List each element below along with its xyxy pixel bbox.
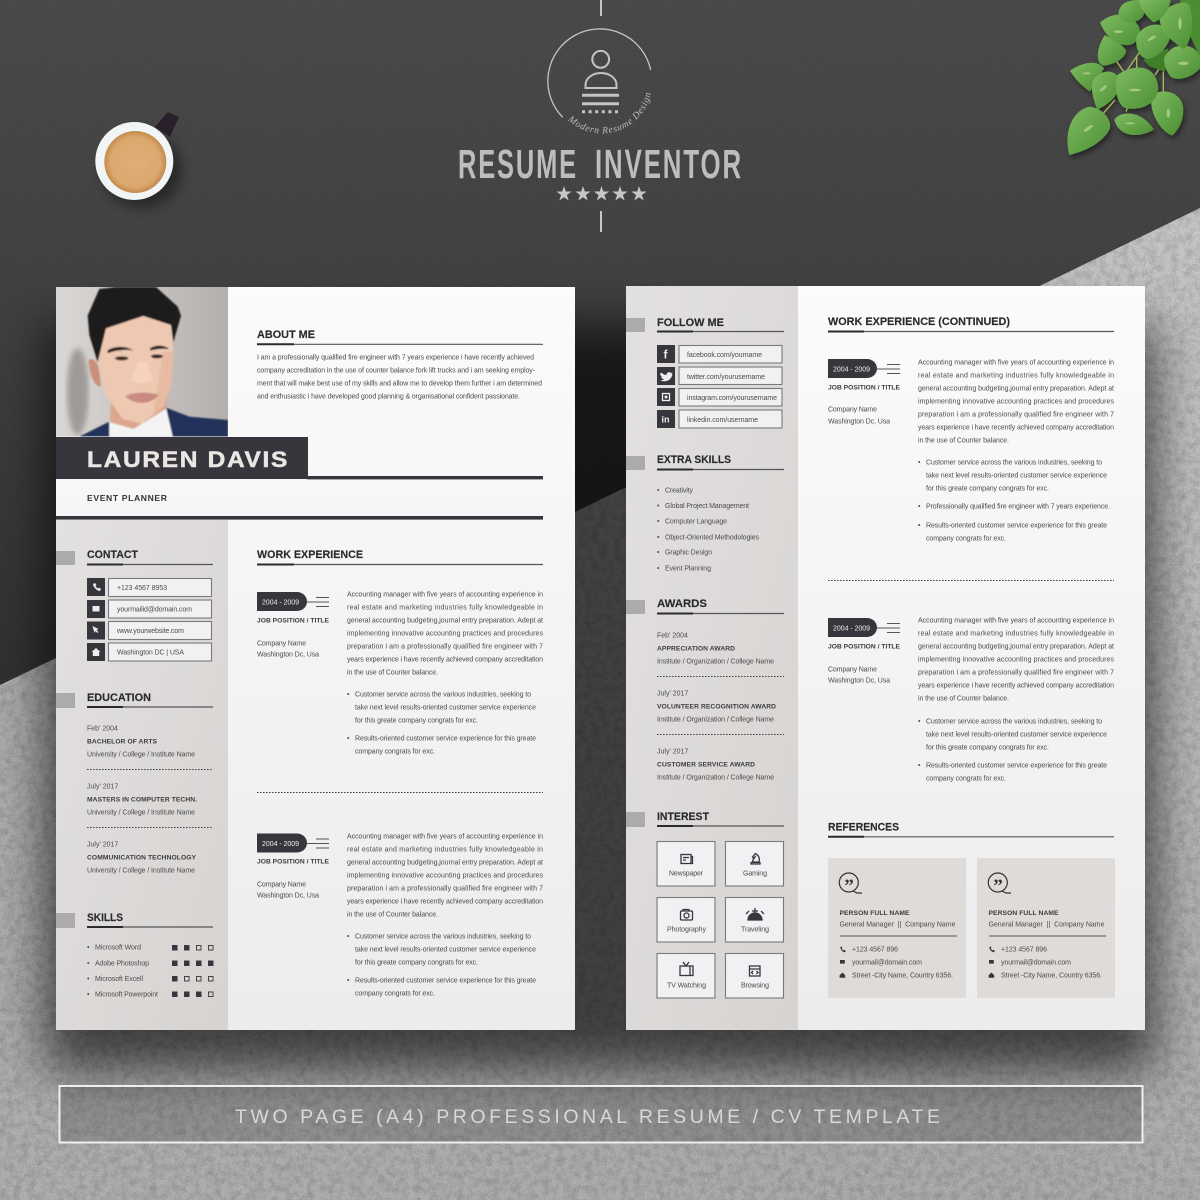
section: education: MASTERS IN COMPUTER TECHN. (87, 796, 197, 803)
job entry one meta (257, 592, 330, 658)
section: skills: • (87, 976, 90, 983)
section: about me (257, 329, 543, 400)
section: interest: Traveling (741, 926, 769, 933)
section: follow me: FOLLOW ME (657, 317, 725, 329)
job entry two text: • (347, 978, 350, 984)
bottom banner (60, 1086, 1142, 1142)
section: references: REFERENCES (828, 822, 899, 834)
job entry three text: Accounting manager with five years of accounting experience in (918, 360, 1114, 366)
reference card two: PERSON FULL NAME (988, 910, 1059, 917)
section: education: COMMUNICATION TECHNOLOGY (87, 854, 197, 861)
job entry four text: for this greate company congrats for exc. (926, 744, 1049, 752)
section: about me: ment that will make best use of my skills and allow me to develop them further i am determined (257, 380, 542, 387)
reference card one: General Manager || Company Name (840, 921, 956, 928)
section: skills: Microsoft Powerpoint (95, 991, 158, 998)
job entry four meta: 2004 - 2009 (833, 625, 870, 632)
job entry four text: in the use of Counter balance. (918, 696, 1009, 702)
job entry four text: preparation i am a professionally qualified fire engineer with 7 (918, 670, 1114, 676)
job title: EVENT PLANNER (87, 493, 168, 503)
job entry three meta (828, 359, 901, 425)
section: awards: Institute / Organization / College Name (657, 658, 774, 665)
job entry one text: • (347, 692, 350, 698)
name band (56, 437, 543, 479)
section: awards (626, 598, 784, 781)
job entry two text: take next level results-oriented customer service experience (355, 946, 536, 954)
section: work experience continued (828, 316, 1114, 782)
job entry one text: implementing innovative accounting practices and procedures (347, 630, 544, 638)
section: contact: www.yourwebsite.com (116, 628, 184, 635)
logo wordmark: INVENTOR (595, 141, 743, 187)
job entry one text: • (347, 736, 350, 742)
section: interest: Newspaper (669, 870, 704, 877)
section: extra skills: EXTRA SKILLS (657, 454, 731, 466)
icon: logo circle with person (548, 29, 651, 117)
reference card two: +123 4567 896 (1001, 946, 1047, 953)
reference card one: yourmail@domain.com (852, 959, 922, 966)
section: skills: • (87, 944, 90, 951)
section: contact: Washington DC | USA (117, 650, 184, 656)
section: interest: TV Watching (667, 982, 706, 989)
job entry four text: years experience i have recently achieved company accreditation (918, 682, 1114, 690)
section: skills: SKILLS (87, 912, 123, 924)
job entry three text: preparation i am a professionally qualified fire engineer with 7 (918, 412, 1114, 418)
section: education: Feb' 2004 (87, 725, 118, 732)
job entry one text (347, 592, 544, 756)
job entry four text: company congrats for exc. (926, 776, 1006, 782)
job entry three text: • (918, 460, 921, 466)
five stars (556, 186, 647, 200)
section: follow me: facebook.com/yourname (687, 352, 762, 359)
section: about me: company accreditation in the use of counter balance fork lift trucks and i am seeking employ- (257, 367, 536, 374)
job entry three text: real estate and marketing industries fully knowledgeable in (918, 372, 1114, 380)
job entry three meta: Washington Dc, Usa (828, 418, 890, 425)
section: contact: yourmailid@domain.com (117, 606, 192, 614)
job entry three text: general accounting budgeting,journal entry preparation. Adept at (918, 386, 1114, 392)
job entry four text (918, 618, 1114, 782)
job entry two meta: JOB POSITION / TITLE (257, 858, 330, 866)
skill rating squares (172, 945, 214, 997)
section: extra skills: • (657, 534, 660, 541)
section: follow me: twitter.com/yourusername (687, 374, 765, 381)
job entry four text: Customer service across the various industries, seeking to (926, 718, 1102, 726)
section: extra skills: • (657, 549, 660, 556)
job entry two text: Customer service across the various industries, seeking to (355, 934, 531, 940)
job entry four text: • (918, 762, 921, 770)
reference card one: PERSON FULL NAME (840, 910, 910, 917)
section: work experience (257, 549, 544, 998)
job entry four text: general accounting budgeting,journal entry preparation. Adept at (918, 644, 1114, 650)
job entry one text: Results-oriented customer service experience for this greate (355, 736, 536, 742)
interest icons (680, 854, 764, 976)
section: education (56, 692, 213, 874)
section: skills: • (87, 960, 90, 967)
job entry one text: take next level results-oriented customer service experience (355, 704, 536, 712)
section: extra skills: Object-Oriented Methodologies (665, 534, 760, 541)
icon: plant leaves (1067, 0, 1200, 155)
job entry one text: real estate and marketing industries fully knowledgeable in (347, 604, 543, 612)
job entry three text: Professionally qualified fire engineer with 7 years experience. (926, 504, 1110, 510)
job entry one text: company congrats for exc. (355, 748, 435, 756)
section: education: July' 2017 (87, 841, 118, 848)
job entry two text: company congrats for exc. (355, 990, 435, 998)
job entry one meta: Washington Dc, Usa (257, 651, 319, 658)
job entry two text: Results-oriented customer service experience for this greate (355, 978, 536, 984)
section: extra skills: Creativity (665, 487, 694, 494)
job entry two text: in the use of Counter balance. (347, 912, 438, 918)
section: follow me (626, 317, 784, 428)
job entry one text: in the use of Counter balance. (347, 670, 438, 676)
job entry three meta: JOB POSITION / TITLE (828, 384, 901, 391)
job entry three meta: Company Name (828, 406, 877, 413)
section: skills (56, 912, 214, 998)
job entry two meta: Washington Dc, Usa (257, 892, 319, 900)
job entry three text: Results-oriented customer service experience for this greate (926, 522, 1107, 530)
job entry two text: general accounting budgeting,journal entry preparation. Adept at (347, 860, 543, 866)
job entry three text: • (918, 504, 921, 510)
section: awards: July' 2017 (657, 690, 688, 697)
job entry one text: general accounting budgeting,journal entry preparation. Adept at (347, 618, 543, 624)
section: work experience: WORK EXPERIENCE (257, 549, 364, 561)
section: extra skills: • (657, 487, 660, 494)
job entry four text: implementing innovative accounting practices and procedures (918, 656, 1114, 664)
reference card two: yourmail@domain.com (1001, 959, 1071, 966)
section: follow me: linkedin.com/username (687, 417, 758, 424)
photo: portrait of man (56, 287, 228, 437)
section: extra skills: • (657, 518, 660, 525)
job entry two text: Accounting manager with five years of accounting experience in (347, 834, 543, 840)
bottom banner: TWO PAGE (A4) PROFESSIONAL RESUME / CV TEMPLATE (235, 1106, 940, 1128)
section: awards: CUSTOMER SERVICE AWARD (657, 761, 755, 768)
section: awards: Feb' 2004 (657, 632, 688, 639)
section: education: BACHELOR OF ARTS (87, 738, 158, 745)
section: skills: Adobe Photoshop (95, 960, 149, 967)
section: extra skills: Event Planning (665, 565, 711, 572)
section: education: University / College / Institute Name (87, 809, 195, 816)
section: education: University / College / Institute Name (87, 751, 195, 758)
section: skills: • (87, 991, 90, 998)
reference card two: ” (993, 876, 1003, 897)
logo wordmark: RESUME (458, 141, 578, 187)
reference card one: Street -City Name, Country 6356. (852, 972, 953, 979)
job entry one meta: JOB POSITION / TITLE (257, 617, 330, 624)
brand logo (458, 0, 743, 232)
section: follow me: in (662, 414, 670, 424)
reference card two: Street -City Name, Country 6356. (1001, 972, 1102, 979)
job entry two text: years experience i have recently achieved company accreditation (347, 898, 543, 906)
job entry two meta: 2004 - 2009 (262, 841, 299, 848)
job entry one text: preparation i am a professionally qualified fire engineer with 7 (347, 644, 543, 650)
section: extra skills: Computer Language (665, 518, 727, 525)
section: awards: VOLUNTEER RECOGNITION AWARD (657, 703, 776, 710)
section: education: July' 2017 (87, 783, 118, 790)
reference card two (977, 858, 1115, 998)
section: awards: Institute / Organization / College Name (657, 716, 774, 723)
section: contact (56, 549, 213, 661)
section: extra skills: • (657, 503, 660, 510)
job entry three text: implementing innovative accounting practices and procedures (918, 398, 1114, 406)
job entry four meta: Washington Dc, Usa (828, 677, 890, 684)
section: work experience continued: WORK EXPERIENCE (CONTINUED) (828, 316, 1010, 328)
section: extra skills (626, 454, 784, 572)
job entry three text: years experience i have recently achieved company accreditation (918, 424, 1114, 432)
job entry four text: • (918, 718, 921, 726)
section: references (828, 822, 1115, 998)
job entry three text (918, 360, 1114, 542)
job entry two text: for this greate company congrats for exc. (355, 960, 478, 966)
section: education: University / College / Institute Name (87, 867, 195, 874)
name band: LAUREN DAVIS (87, 447, 289, 472)
job entry two text: preparation i am a professionally qualified fire engineer with 7 (347, 886, 543, 892)
section: awards: Institute / Organization / College Name (657, 774, 774, 781)
job entry one text: Accounting manager with five years of accounting experience in (347, 592, 543, 598)
job entry three text: • (918, 522, 921, 530)
job entry four text: Results-oriented customer service experience for this greate (926, 762, 1107, 770)
job entry three text: take next level results-oriented customer service experience (926, 472, 1107, 480)
job entry one text: for this greate company congrats for exc. (355, 718, 478, 724)
job entry three text: Customer service across the various industries, seeking to (926, 460, 1102, 466)
job entry four meta: Company Name (828, 666, 877, 673)
job entry four text: take next level results-oriented customer service experience (926, 732, 1107, 738)
job entry two meta: Company Name (257, 882, 306, 888)
job entry three text: in the use of Counter balance. (918, 438, 1009, 444)
section: skills: Microsoft Excell (95, 976, 143, 983)
section: extra skills: Graphic Design (665, 549, 712, 556)
job entry one meta: Company Name (257, 640, 306, 647)
job entry one meta: 2004 - 2009 (262, 599, 299, 606)
panel: right page sidebar (626, 286, 798, 1030)
job entry two text (347, 834, 544, 998)
reference card one: +123 4567 896 (852, 946, 898, 953)
panel: left sidebar (56, 520, 228, 1030)
section: extra skills: • (657, 565, 660, 572)
section: follow me: instagram.com/yourusername (687, 395, 777, 402)
job entry four text: real estate and marketing industries fully knowledgeable in (918, 630, 1114, 638)
job entry two meta (257, 834, 330, 900)
job entry three text: company congrats for exc. (926, 536, 1006, 542)
section: interest: INTEREST (657, 811, 709, 823)
brand logo: Modern Resume Design (568, 92, 651, 134)
section: interest: Photography (667, 926, 706, 933)
section: awards: APPRECIATION AWARD (657, 645, 735, 652)
section: about me: ABOUT ME (257, 329, 316, 341)
section: interest: Gaming (743, 870, 767, 877)
section: awards: July' 2017 (657, 748, 688, 755)
icon: coffee cup (95, 112, 182, 208)
job entry three text: for this greate company congrats for exc. (926, 486, 1049, 492)
reference card two: General Manager || Company Name (988, 921, 1105, 928)
section: skills: Microsoft Word (95, 944, 141, 951)
job entry one text: years experience i have recently achieved company accreditation (347, 656, 543, 664)
logo wordmark (458, 141, 743, 187)
section: awards: AWARDS (657, 598, 708, 610)
section: follow me: f (664, 348, 668, 362)
panel: resume page one (56, 287, 575, 1030)
job entry one text: Customer service across the various industries, seeking to (355, 692, 531, 698)
section: education: EDUCATION (87, 692, 151, 704)
job entry three meta: 2004 - 2009 (833, 366, 870, 373)
job entry four meta: JOB POSITION / TITLE (828, 643, 901, 650)
job entry four meta (828, 618, 901, 684)
section: interest (626, 811, 784, 998)
section: about me: and enthusiastic i have developed good planning & organisational confident passionate. (257, 393, 520, 400)
section: about me: I am a professionally qualified fire engineer with 7 years experience i have recently achieved (257, 354, 534, 361)
section: contact: +123 4567 8953 (117, 585, 167, 592)
job entry two text: real estate and marketing industries fully knowledgeable in (347, 846, 543, 854)
reference card one: ” (844, 876, 854, 897)
section: extra skills: Global Project Management (665, 503, 749, 510)
job entry two text: implementing innovative accounting practices and procedures (347, 872, 544, 880)
panel: resume page two (626, 286, 1145, 1030)
job entry four text: Accounting manager with five years of accounting experience in (918, 618, 1114, 624)
reference card one (828, 858, 966, 998)
section: interest: Browsing (741, 982, 769, 989)
section: contact: CONTACT (87, 549, 138, 561)
job entry two text: • (347, 934, 350, 940)
